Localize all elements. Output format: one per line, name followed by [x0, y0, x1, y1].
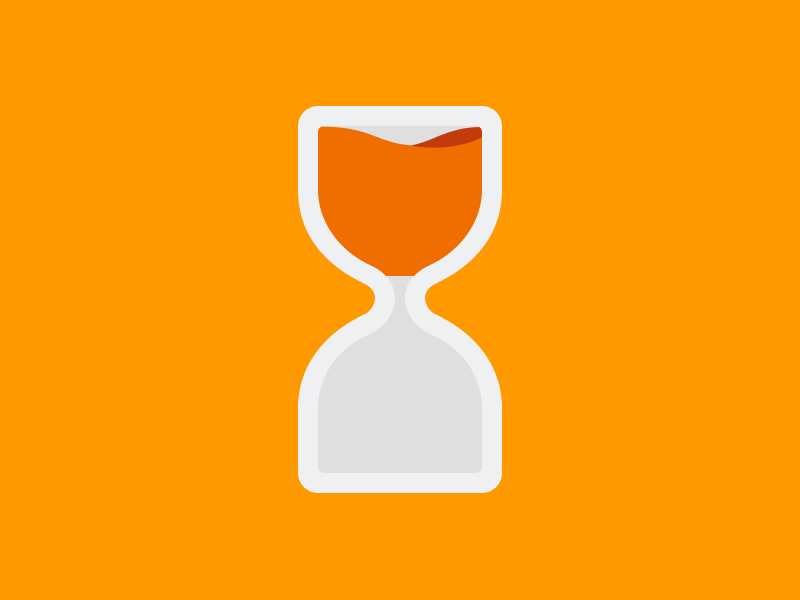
orange sand [310, 127, 484, 276]
hourglass [298, 106, 502, 493]
dark sand wave [410, 127, 482, 148]
hourglass illustration on orange background [298, 106, 502, 493]
sand contents [310, 127, 484, 276]
hourglass frame [298, 106, 502, 493]
glass interior [318, 126, 482, 473]
